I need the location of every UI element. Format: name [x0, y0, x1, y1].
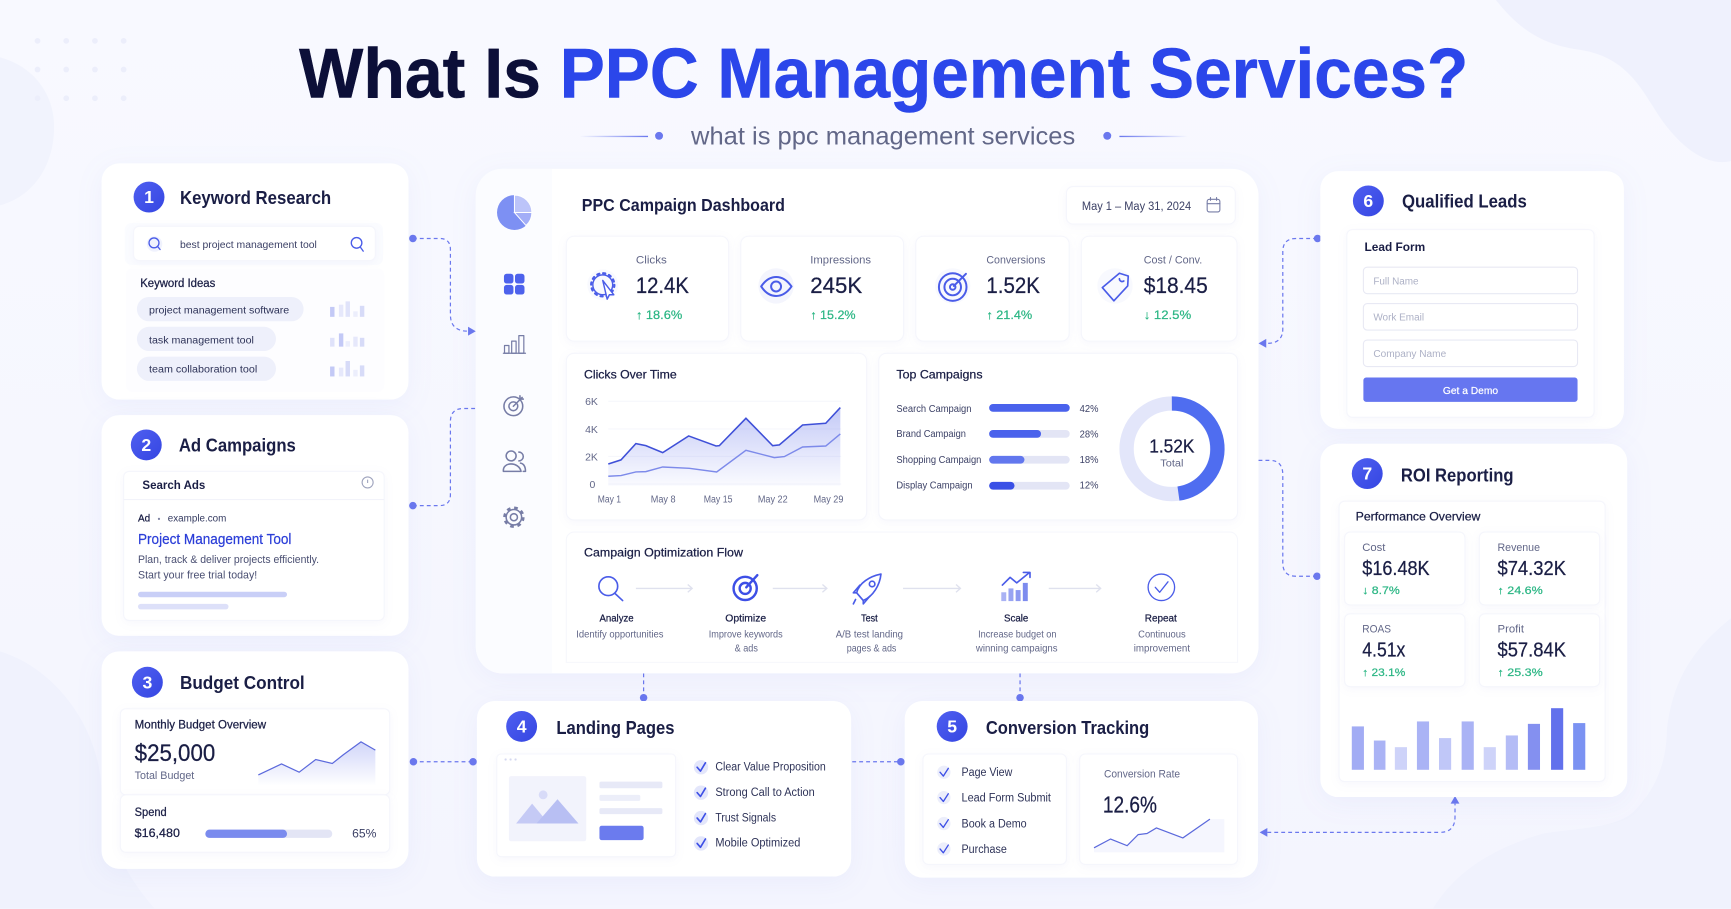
step: analyze: Analyze — [599, 614, 634, 625]
keyword ideas list: project management software — [149, 306, 289, 317]
panel: ad campaigns — [102, 415, 408, 636]
heading: ad campaigns: Ad Campaigns — [179, 435, 296, 456]
keyword ideas list: Keyword Ideas — [140, 278, 215, 290]
connector: qualified leads to dashboard — [1259, 235, 1321, 348]
connector: conversion tracking to ROI reporting — [1260, 796, 1459, 837]
keyword ideas list — [126, 268, 384, 392]
step: repeat — [1134, 574, 1190, 654]
chart card: top campaigns: Top Campaigns — [896, 368, 983, 382]
search ads card: Project Management Tool — [138, 532, 291, 548]
monthly budget overview card: Total Budget — [135, 770, 194, 782]
search ads card: example.com — [168, 514, 227, 525]
metric: revenue: Revenue — [1498, 542, 1540, 554]
metric: cost: Cost — [1362, 542, 1385, 554]
checklist: landing pages — [694, 760, 826, 851]
bar rows — [896, 404, 1099, 492]
sparkline: conversion rate — [1094, 819, 1224, 852]
title: What Is — [299, 34, 541, 113]
spend card: $16,480 — [135, 826, 180, 840]
arrow — [636, 585, 692, 592]
step badge 4: 4 — [517, 716, 527, 736]
keyword ideas list: team collaboration tool — [149, 365, 257, 376]
metric: ROAS: ↑ 23.1% — [1362, 667, 1406, 679]
panel: keyword research — [102, 163, 408, 400]
KPI card: conversions: Conversions — [986, 254, 1046, 266]
performance overview card — [1339, 501, 1605, 782]
KPI card: impressions: 245K — [810, 273, 862, 298]
metric: cost: ↓ 8.7% — [1362, 585, 1400, 597]
chart card: clicks over time: May 29 — [814, 494, 844, 505]
spend card — [120, 795, 390, 852]
icon: gear — [505, 508, 523, 527]
chart card: top campaigns — [879, 353, 1238, 520]
KPI card: conversions: 1.52K — [986, 273, 1040, 298]
bar chart: performance — [1352, 708, 1585, 770]
form field: company name: Company Name — [1373, 349, 1446, 360]
subtitle — [580, 123, 1188, 151]
step badge 1: 1 — [144, 187, 154, 207]
connector: dashboard to ROI reporting — [1259, 460, 1321, 580]
bar rows: Search Campaign — [896, 404, 971, 415]
checklist: landing pages: Mobile Optimized — [715, 838, 800, 850]
conversion rate card: Conversion Rate — [1104, 769, 1180, 781]
step: analyze: Identify opportunities — [576, 630, 664, 641]
panel: landing pages — [477, 701, 851, 877]
KPI card: clicks — [566, 236, 729, 341]
chart card: clicks over time: 6K — [585, 397, 598, 408]
search ads card: Search Ads — [142, 478, 206, 492]
arrow — [903, 585, 960, 592]
form field: work email: Work Email — [1373, 313, 1424, 324]
KPI card: clicks: Clicks — [636, 254, 667, 266]
icon: people — [503, 451, 525, 471]
KPI card: clicks: ↑ 18.6% — [636, 308, 682, 322]
panel: PPC campaign dashboard — [476, 169, 1259, 673]
icon: pie logo — [497, 195, 532, 230]
checklist: landing pages: Strong Call to Action — [715, 787, 815, 799]
icon: bullseye — [935, 268, 970, 304]
step: repeat: Repeat — [1145, 614, 1177, 625]
step badge 3: 3 — [142, 672, 152, 692]
bar rows: Display Campaign — [896, 481, 973, 492]
monthly budget overview card: Monthly Budget Overview — [135, 720, 267, 732]
step badge 4 — [506, 711, 537, 742]
form field: work email — [1363, 304, 1578, 330]
icon: price tag — [1097, 268, 1133, 304]
heading: budget control: Budget Control — [180, 672, 305, 693]
metric: ROAS: 4.51x — [1362, 639, 1405, 661]
KPI card: cost per conversion: $18.45 — [1144, 273, 1208, 298]
form field: company name — [1363, 340, 1578, 367]
chart card: clicks over time: May 8 — [651, 494, 676, 505]
monthly budget overview card: $25,000 — [135, 741, 215, 767]
metric: revenue: $74.32K — [1498, 558, 1566, 580]
KPI card: impressions — [741, 236, 904, 341]
metric: ROAS — [1345, 614, 1465, 687]
step: test — [836, 574, 903, 654]
step badge 6: 6 — [1363, 191, 1373, 211]
step: test: pages & ads — [847, 643, 896, 654]
connector: budget control to landing pages — [410, 758, 477, 765]
metric: ROAS: ROAS — [1362, 624, 1391, 636]
step: optimize: Improve keywords — [709, 630, 783, 641]
connector: keyword research to dashboard — [409, 235, 476, 336]
button: get a demo: Get a Demo — [1443, 386, 1498, 397]
panel: conversion tracking — [905, 701, 1258, 878]
metric: profit: ↑ 25.3% — [1498, 667, 1543, 679]
form field: full name — [1363, 267, 1578, 294]
KPI card: cost per conversion: Cost / Conv. — [1144, 254, 1202, 266]
search ads card: Start your free trial today! — [138, 569, 257, 581]
checklist: conversions: Purchase — [962, 844, 1007, 856]
step badge 2: 2 — [141, 435, 151, 455]
metric: profit: $57.84K — [1498, 639, 1566, 661]
conversion rate card — [1080, 754, 1238, 864]
KPI card: conversions: ↑ 21.4% — [986, 308, 1032, 322]
checklist: conversions: Page View — [962, 767, 1013, 779]
KPI card: impressions: ↑ 15.2% — [810, 308, 856, 322]
checklist: landing pages: Trust Signals — [715, 812, 776, 824]
step badge 6 — [1353, 185, 1384, 216]
search box — [125, 223, 383, 265]
search box: best project management tool — [180, 240, 317, 251]
checklist: landing pages: Clear Value Proposition — [715, 762, 826, 774]
step: test: Test — [861, 614, 878, 625]
step: scale: Scale — [1004, 614, 1028, 625]
subtitle: what is ppc management services — [690, 123, 1075, 151]
bar rows: 42% — [1080, 404, 1099, 415]
card: campaign optimization flow: Campaign Optimization Flow — [584, 545, 743, 559]
step badge 3 — [132, 667, 163, 698]
sparkline: budget — [258, 742, 375, 786]
arrow — [1049, 585, 1101, 592]
step: analyze — [576, 577, 664, 641]
step: scale: winning campaigns — [975, 643, 1058, 654]
metric: revenue: ↑ 24.6% — [1498, 585, 1543, 597]
checklist: conversions: Lead Form Submit — [962, 792, 1052, 804]
heading: landing pages: Landing Pages — [556, 717, 675, 738]
panel: budget control — [102, 651, 408, 869]
icon: clock — [362, 477, 373, 488]
search ads card: Plan, track & deliver projects efficiently. — [138, 554, 319, 566]
chart card: clicks over time: May 22 — [758, 494, 788, 505]
KPI card: cost per conversion: ↓ 12.5% — [1144, 308, 1191, 322]
step badge 2 — [131, 429, 162, 460]
step badge 7: 7 — [1362, 464, 1372, 484]
date selector — [1066, 187, 1235, 224]
checklist: conversions — [923, 754, 1066, 864]
form field: full name: Full Name — [1373, 276, 1419, 287]
step: repeat: improvement — [1134, 643, 1190, 654]
chart card: clicks over time — [566, 353, 867, 520]
spend card: Spend — [135, 807, 167, 819]
chart card: clicks over time: 2K — [585, 452, 598, 463]
panel: qualified leads — [1320, 171, 1624, 429]
metric: profit — [1479, 614, 1600, 687]
chart card: clicks over time: May 15 — [704, 494, 733, 505]
donut chart: Total — [1160, 458, 1183, 469]
heading: keyword research: Keyword Research — [180, 187, 331, 208]
metric: profit: Profit — [1498, 624, 1524, 636]
step: test: A/B test landing — [836, 630, 903, 641]
chart card: clicks over time: May 1 — [598, 494, 621, 505]
sidebar icons — [497, 195, 532, 527]
panel: ROI reporting — [1320, 444, 1627, 797]
connector: ad campaigns to dashboard — [409, 408, 476, 509]
keyword ideas list: task management tool — [149, 335, 254, 346]
step: optimize: Optimize — [725, 614, 766, 625]
donut chart — [1127, 403, 1217, 494]
KPI card: clicks: 12.4K — [636, 273, 689, 298]
icon: eye — [758, 268, 794, 304]
line chart — [608, 408, 840, 486]
step: optimize — [709, 575, 783, 654]
heading: conversion tracking: Conversion Tracking — [986, 717, 1149, 738]
donut chart: 1.52K — [1149, 436, 1195, 457]
bar rows: Brand Campaign — [896, 429, 966, 440]
step: optimize: & ads — [735, 643, 758, 654]
search ads card: Ad — [138, 514, 150, 525]
spend card: 65% — [352, 826, 377, 840]
checklist: conversions: Book a Demo — [962, 818, 1027, 830]
connector: landing pages to conversion tracking — [852, 758, 905, 765]
chart card: clicks over time: 0 — [590, 480, 596, 491]
lead form — [1347, 230, 1594, 417]
conversion rate card: 12.6% — [1103, 792, 1157, 818]
search ads card — [124, 471, 384, 620]
chart card: clicks over time: Clicks Over Time — [584, 368, 677, 382]
step badge 5: 5 — [947, 716, 957, 736]
step: repeat: Continuous — [1138, 630, 1186, 641]
KPI card: conversions — [916, 236, 1069, 341]
lead form: Lead Form — [1364, 240, 1425, 254]
heading: ROI reporting: ROI Reporting — [1401, 464, 1514, 485]
icon: grid — [504, 274, 524, 295]
connector: dashboard to landing pages — [640, 673, 647, 701]
metric: cost: $16.48K — [1362, 558, 1430, 580]
metric: revenue — [1479, 532, 1600, 605]
card: campaign optimization flow — [566, 532, 1238, 662]
step: scale — [975, 572, 1058, 654]
KPI card: cost per conversion — [1081, 236, 1237, 341]
step badge 7 — [1352, 458, 1383, 489]
chart card: clicks over time: 4K — [585, 425, 598, 436]
connector: dashboard to conversion tracking — [1016, 673, 1024, 701]
KPI card: impressions: Impressions — [810, 254, 872, 266]
bar rows: 18% — [1080, 455, 1099, 466]
dashboard heading: PPC Campaign Dashboard — [582, 196, 785, 215]
step badge 5 — [937, 711, 968, 742]
icon: target — [504, 396, 523, 416]
icon: click target — [587, 269, 618, 300]
step: scale: Increase budget on — [978, 630, 1056, 641]
metric: cost — [1345, 532, 1465, 605]
landing page mockup — [497, 754, 676, 857]
arrow — [773, 585, 827, 592]
icon: bars — [503, 336, 525, 353]
bar rows: 12% — [1080, 481, 1099, 492]
performance overview card: Performance Overview — [1356, 510, 1481, 524]
title: PPC Management Services? — [560, 34, 1468, 113]
monthly budget overview card — [120, 709, 390, 795]
heading: qualified leads: Qualified Leads — [1402, 191, 1527, 212]
bar rows: Shopping Campaign — [896, 455, 981, 466]
button: get a demo — [1363, 378, 1578, 402]
step badge 1 — [134, 182, 164, 213]
bar rows: 28% — [1080, 430, 1099, 441]
date selector: May 1 – May 31, 2024 — [1082, 201, 1192, 213]
